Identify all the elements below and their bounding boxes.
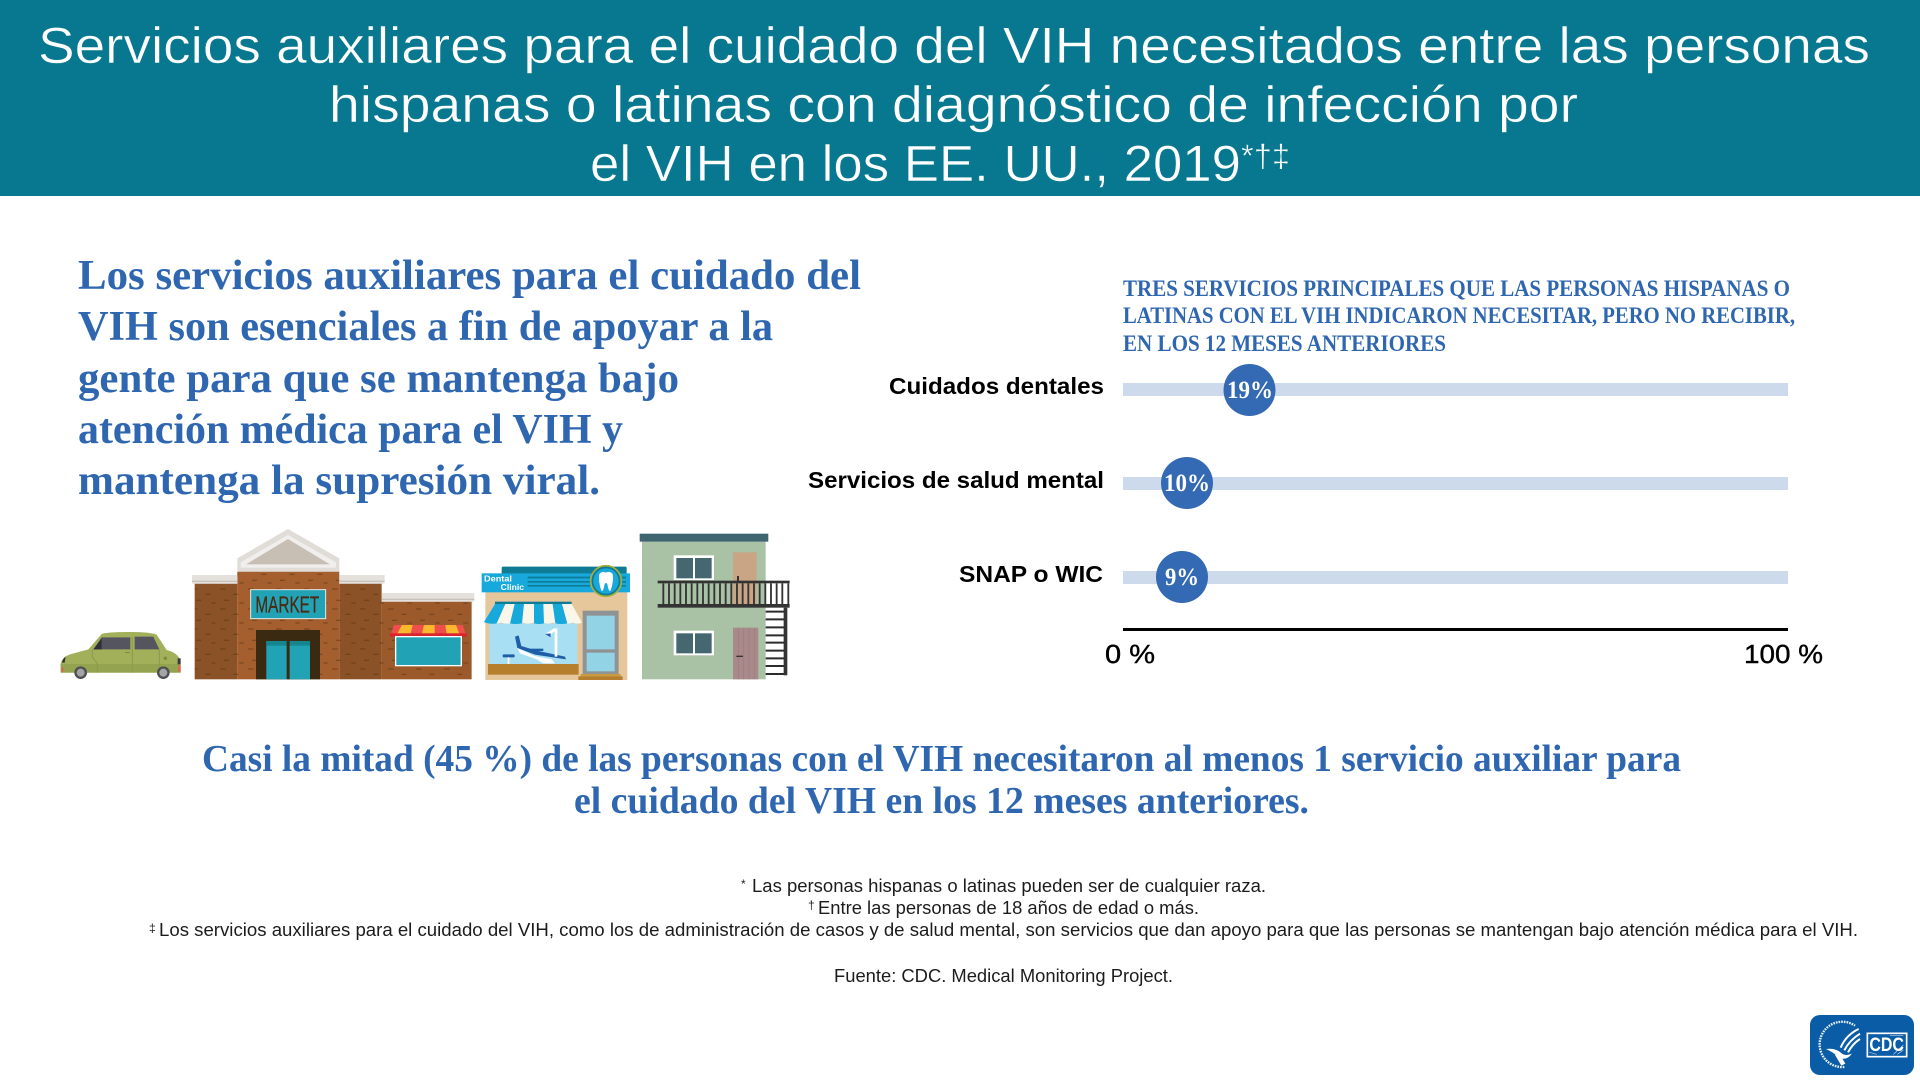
intro text block: VIH son esenciales a fin de apoyar a la — [78, 304, 773, 350]
bar: Cuidados dentales 19%: 19% — [1227, 377, 1273, 404]
footnotes — [149, 876, 1858, 986]
callout — [202, 738, 1681, 822]
callout: el cuidado del VIH en los 12 meses anteriores. — [574, 780, 1309, 822]
axis labels: 0 % — [1105, 639, 1155, 669]
chart title: TRES SERVICIOS PRINCIPALES QUE LAS PERSONAS HISPANAS O — [1123, 276, 1790, 301]
chart title: LATINAS CON EL VIH INDICARON NECESITAR, PERO NO RECIBIR, — [1123, 303, 1795, 328]
illustration: street of buildings — [61, 529, 790, 680]
footnotes: Las personas hispanas o latinas pueden ser de cualquier raza. — [752, 876, 1266, 896]
footnotes: ‡ — [149, 921, 156, 935]
icon: car — [61, 632, 181, 679]
footnotes: * — [741, 877, 746, 891]
icon: dental clinic: Clinic — [501, 583, 525, 592]
bar: SNAP o WIC 9% — [959, 551, 1788, 603]
bar: Servicios de salud mental 10%: Servicios de salud mental — [808, 467, 1104, 493]
icon: market building — [192, 529, 474, 679]
intro text block: Los servicios auxiliares para el cuidado del — [78, 253, 861, 299]
bar: Cuidados dentales 19% — [889, 364, 1788, 416]
footnotes: † — [808, 898, 815, 912]
footnotes: Fuente: CDC. Medical Monitoring Project. — [834, 966, 1173, 986]
title: *†‡ — [1241, 138, 1290, 174]
intro text block: mantenga la supresión viral. — [78, 458, 600, 504]
chart title — [1123, 276, 1795, 356]
bar: SNAP o WIC 9%: SNAP o WIC — [959, 561, 1103, 587]
title: hispanas o latinas con diagnóstico de infección por — [329, 76, 1578, 133]
intro text block: gente para que se mantenga bajo — [78, 356, 679, 402]
axis line — [1123, 628, 1788, 631]
bar chart — [808, 364, 1823, 669]
footnotes: Los servicios auxiliares para el cuidado del VIH, como los de administración de casos y de salud mental, son servicios que dan apoyo para que las personas se mantengan bajo atención médica para el VIH. — [159, 920, 1858, 940]
header banner — [0, 0, 1920, 196]
icon: apartment house — [640, 534, 790, 679]
bar: SNAP o WIC 9%: 9% — [1165, 564, 1199, 591]
icon: market building: MARKET — [255, 592, 319, 618]
callout: Casi la mitad (45 %) de las personas con el VIH necesitaron al menos 1 servicio auxiliar para — [202, 738, 1681, 780]
chart title: EN LOS 12 MESES ANTERIORES — [1123, 331, 1446, 356]
title: Servicios auxiliares para el cuidado del VIH necesitados entre las personas — [38, 17, 1870, 74]
axis labels — [1105, 639, 1823, 669]
icon: dental clinic — [482, 566, 630, 680]
footnotes: Entre las personas de 18 años de edad o más. — [818, 898, 1199, 918]
icon: dental clinic: Dental — [484, 575, 512, 584]
bar: Servicios de salud mental 10% — [808, 457, 1788, 509]
title: el VIH en los EE. UU., 2019 — [590, 135, 1241, 192]
logo: CDC: CDC — [1869, 1035, 1904, 1056]
intro text block: atención médica para el VIH y — [78, 407, 623, 453]
bar: Cuidados dentales 19%: Cuidados dentales — [889, 373, 1104, 399]
logo: CDC — [1810, 1015, 1914, 1075]
intro text block — [78, 253, 861, 504]
bar: Servicios de salud mental 10%: 10% — [1164, 470, 1210, 497]
title — [38, 17, 1870, 192]
axis labels: 100 % — [1744, 639, 1823, 669]
